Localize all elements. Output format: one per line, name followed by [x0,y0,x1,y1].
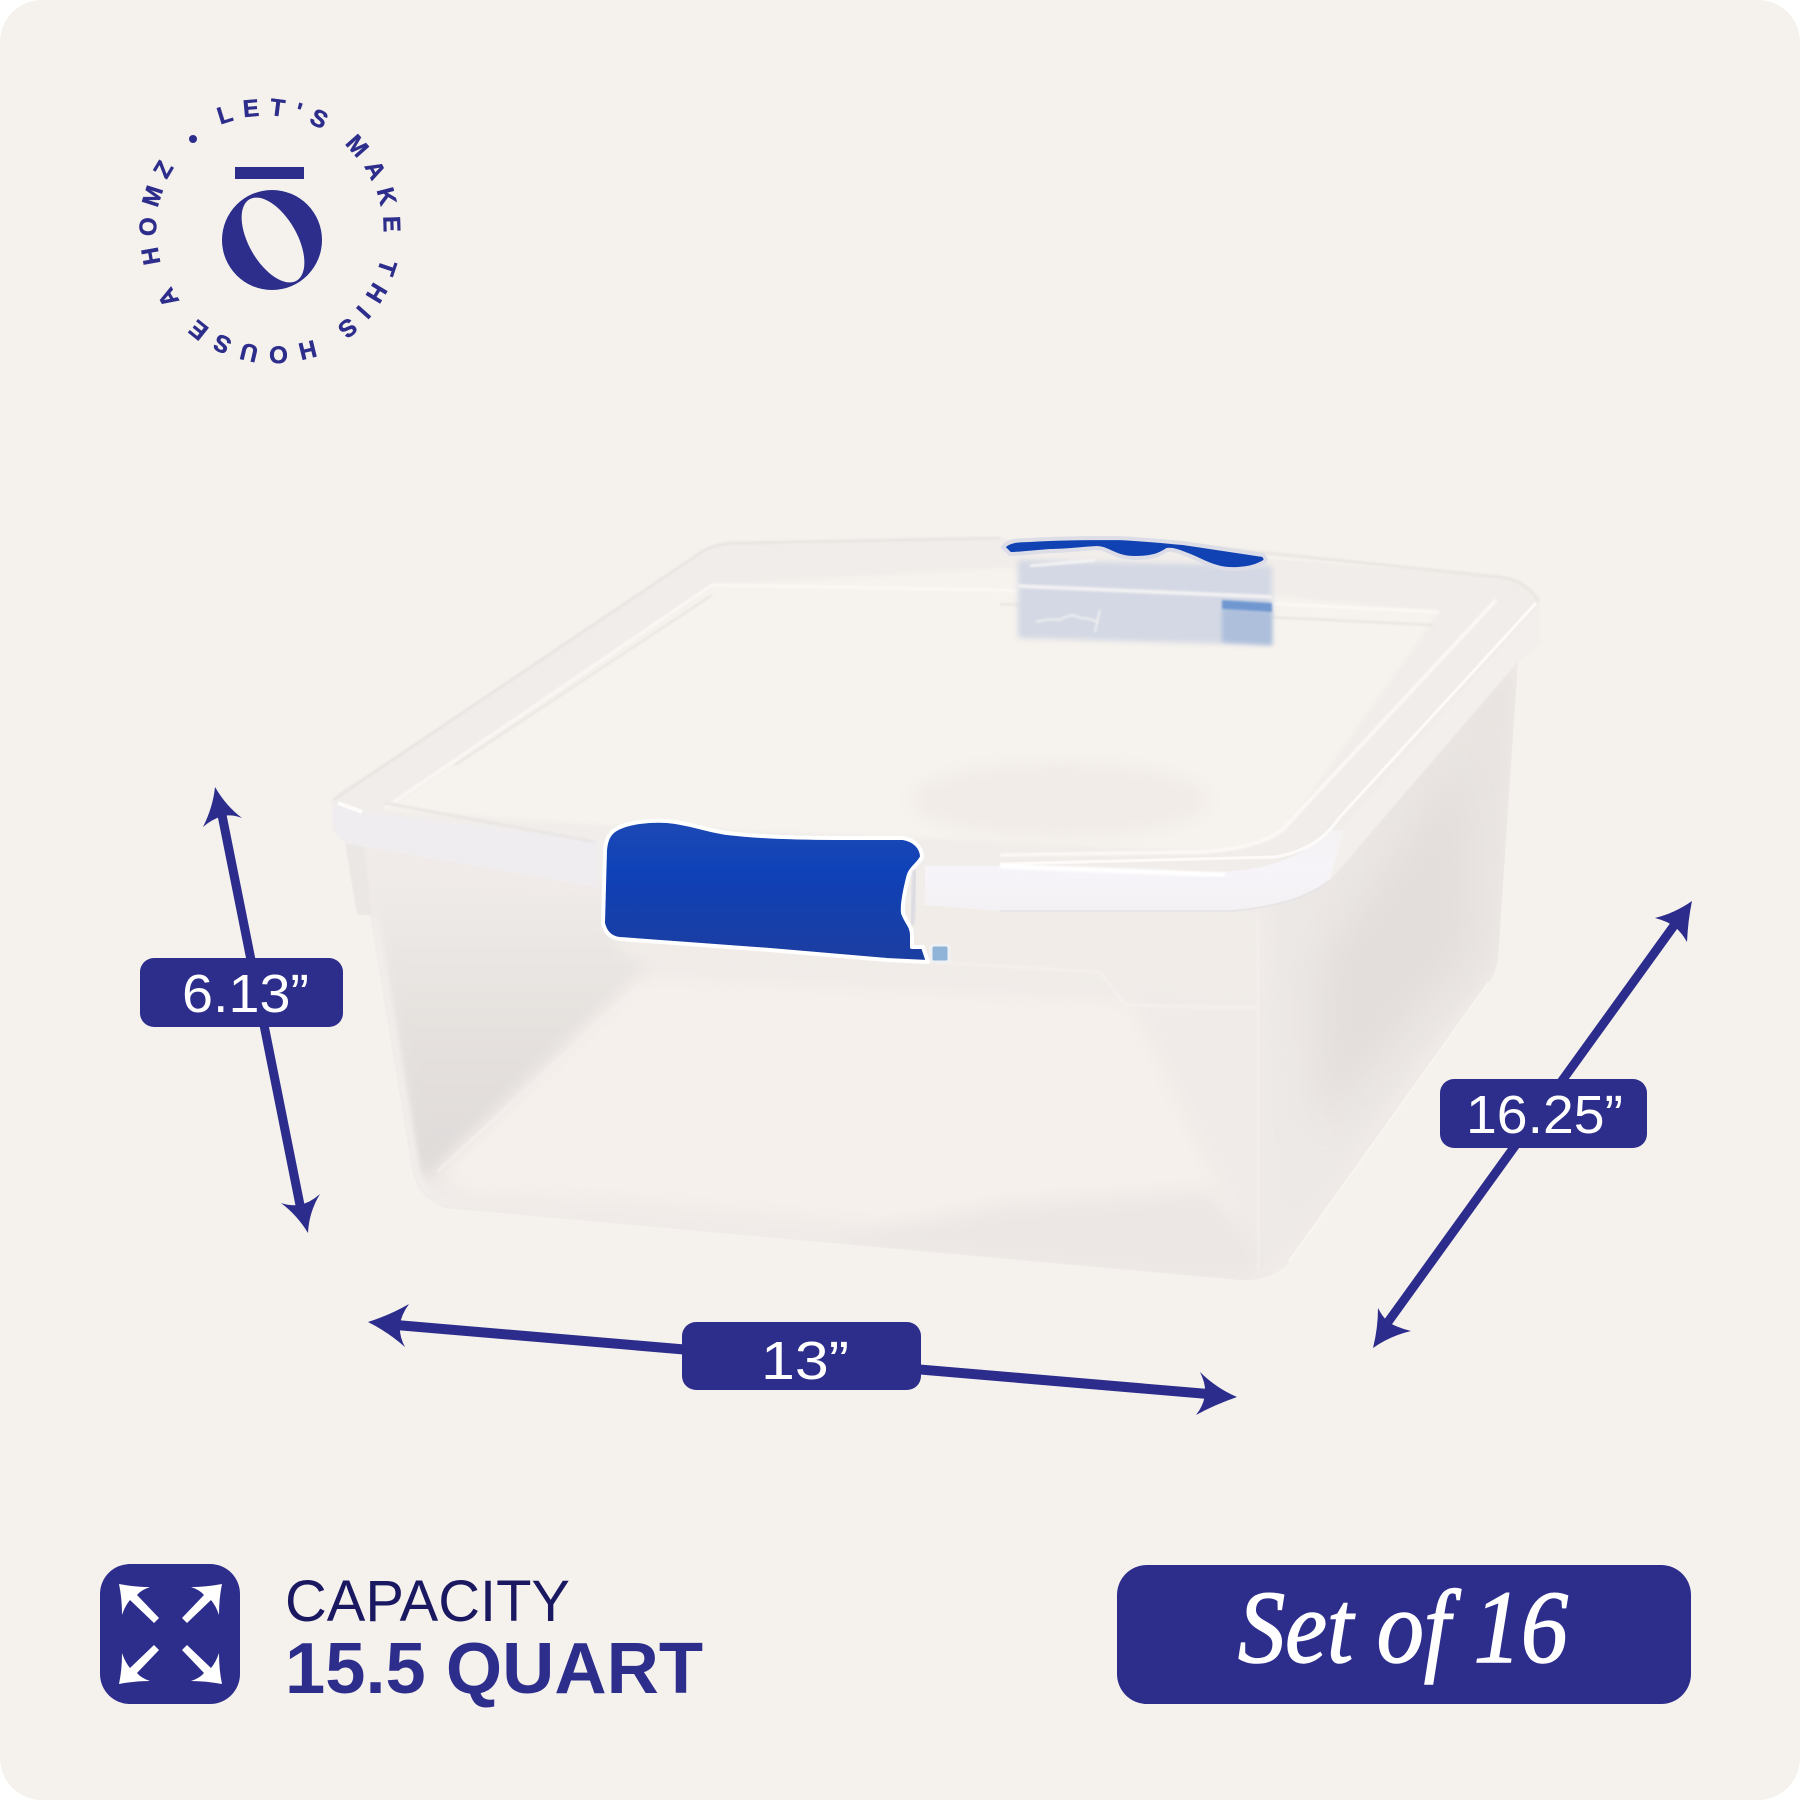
arrow: height [203,787,320,1233]
depth label: 16.25” [1466,1085,1623,1145]
depth label [1440,1079,1647,1148]
icon: capacity expand arrows [100,1564,240,1704]
logo letter o [222,187,322,293]
slogan separator dot [189,135,197,143]
capacity value: 15.5 QUART [285,1629,703,1709]
rear blue latch [1003,538,1266,569]
plastic storage container [333,538,1539,1282]
brand logo badge [139,98,401,364]
set of 16 badge [1117,1565,1691,1704]
circular slogan text: LET'S MAKE THIS HOUSE A HOMZ [139,98,401,364]
width label: 13” [761,1331,849,1391]
rear latch strap [1018,560,1272,645]
arrow: width [368,1304,1237,1415]
set of 16 badge: Set of 16 [1238,1570,1568,1685]
width label [682,1322,921,1391]
capacity label: CAPACITY [285,1569,570,1634]
container body [346,667,1517,1280]
latch hinge [590,845,949,962]
height label: 6.13” [182,964,309,1024]
height label [140,958,343,1027]
logo macron bar [235,167,304,179]
front blue latch [603,821,928,962]
container lid [333,538,1539,911]
arrow: depth [1373,901,1692,1348]
